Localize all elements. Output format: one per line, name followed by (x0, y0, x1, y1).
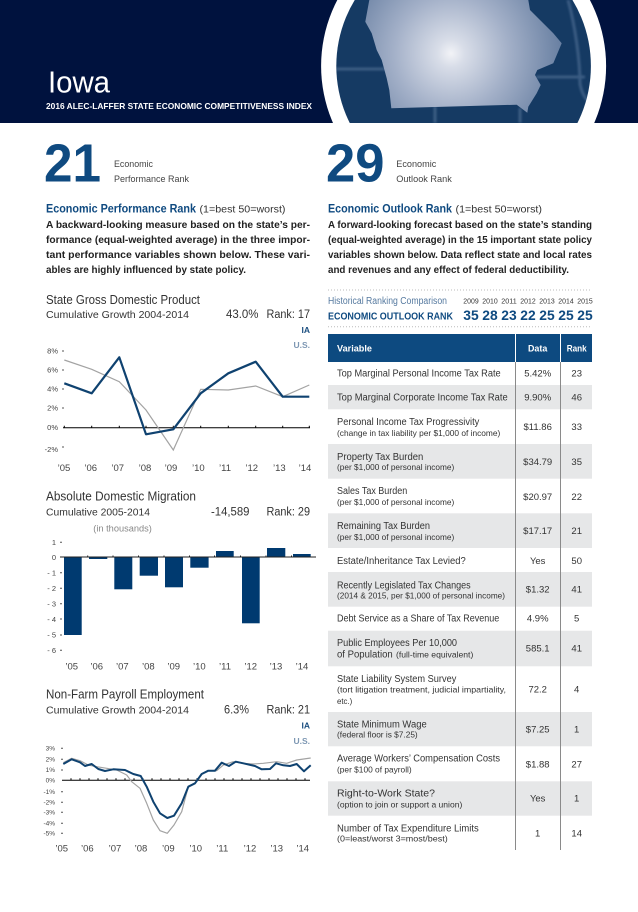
line chart: payroll employment (43, 746, 311, 854)
panel: economic performance (43, 134, 316, 854)
bar chart: domestic migration: ’09 (167, 662, 180, 672)
row: right to work: Yes (530, 794, 546, 805)
row: public employees: 41 (571, 644, 582, 655)
line chart: payroll employment: 1% (46, 767, 55, 774)
outlook heading (328, 202, 542, 216)
line chart: payroll employment: 0% (46, 778, 55, 784)
chart heading: domestic migration: Rank: 29 (266, 506, 310, 518)
historical ranking comparison: 2015 (577, 296, 593, 306)
row: liability survey: (tort litigation treatment, judicial impartiality, (337, 685, 506, 695)
outlook rank label: Outlook Rank (396, 174, 452, 185)
row: legislated tax changes: Recently Legislated Tax Changes (337, 580, 471, 591)
line chart: gross domestic product: ’06 (84, 463, 97, 474)
historical ranking comparison: 2014 (558, 296, 574, 306)
line chart: payroll employment: -5% (43, 830, 55, 838)
line chart: payroll employment: ’14 (296, 844, 309, 854)
row: sales tax: $20.97 (523, 492, 552, 503)
row: right to work (337, 789, 579, 810)
row: tax expenditure limits (337, 824, 582, 844)
bar chart: domestic migration: ’06 (90, 662, 103, 672)
row: estate tax (337, 556, 582, 567)
row: tax progressivity: (change in tax liability per $1,000 of income) (337, 428, 500, 438)
row: estate tax: 50 (571, 556, 582, 567)
historical ranking comparison: 2013 (539, 296, 555, 306)
historical ranking comparison: 2011 (501, 296, 517, 306)
row: liability survey: etc.) (337, 696, 352, 706)
line chart: payroll employment: -4% (43, 820, 55, 828)
historical ranking comparison: ECONOMIC OUTLOOK RANK (328, 310, 453, 322)
line chart: gross domestic product: ’10 (192, 463, 205, 474)
bar chart: domestic migration: ’11 (219, 662, 231, 672)
line chart: gross domestic product: 2% (47, 404, 58, 412)
row: public employees (337, 638, 582, 661)
row: minimum wage (337, 720, 579, 739)
row: minimum wage: 1 (574, 725, 579, 736)
line chart: payroll employment: ’12 (244, 844, 256, 854)
chart heading: payroll employment: 6.3% (224, 704, 249, 716)
bar chart: domestic migration: - 2 (47, 584, 56, 593)
performance description: formance (equal-weighted average) in the three impor- (46, 234, 310, 246)
row: right to work: 1 (574, 794, 579, 805)
historical ranking comparison: 25 (577, 307, 593, 323)
chart heading: domestic migration: (in thousands) (93, 524, 152, 534)
outlook description: A forward-looking forecast based on the state’s standing (328, 219, 592, 231)
row: corporate income tax rate: 9.90% (524, 393, 552, 404)
icon: globe ring (321, 0, 606, 123)
outlook heading: Economic Outlook Rank (328, 202, 452, 216)
bar chart: domestic migration: ’14 (296, 662, 308, 672)
performance heading: (1=best 50=worst) (200, 204, 286, 216)
performance rank number: 21 (44, 134, 101, 194)
line chart: gross domestic product: ’08 (139, 463, 151, 474)
performance description: tant performance variables shown below. These vari- (46, 249, 310, 261)
performance rank label: Economic (114, 159, 153, 170)
bar chart: domestic migration: - 6 (47, 646, 56, 655)
table row bands (328, 385, 592, 816)
bar chart: domestic migration: ’13 (270, 662, 282, 672)
row: personal income tax rate: 23 (571, 369, 582, 380)
chart heading: domestic migration: Absolute Domestic Migration (46, 490, 196, 504)
historical ranking comparison: 22 (520, 307, 536, 323)
line chart: gross domestic product: ’11 (219, 463, 231, 474)
line chart: payroll employment: ’06 (81, 844, 94, 854)
chart heading: gross domestic product (46, 293, 310, 350)
row: liability survey: State Liability System Survey (337, 674, 456, 685)
row: sales tax (337, 486, 582, 507)
row: property tax: 35 (571, 457, 582, 468)
line chart: gross domestic product: 8% (47, 346, 58, 356)
line chart: gross domestic product: ’12 (245, 463, 258, 474)
chart heading: payroll employment: Cumulative Growth 2004-2014 (46, 704, 189, 716)
outlook rank label: Economic (396, 159, 437, 170)
row: tax progressivity: 33 (571, 422, 582, 433)
performance rank label: Performance Rank (114, 174, 189, 185)
line chart: gross domestic product: ’07 (111, 463, 124, 474)
row: property tax: Property Tax Burden (337, 452, 423, 463)
table: policy variables (328, 334, 592, 850)
table header: Variable (337, 344, 372, 355)
row: debt service: 4.9% (527, 614, 549, 625)
chart heading: domestic migration (46, 490, 310, 534)
row: remaining tax (337, 521, 582, 542)
row: personal income tax rate: Top Marginal Personal Income Tax Rate (337, 369, 501, 380)
row: workers compensation (337, 754, 582, 775)
line chart: gross domestic product: 0% (47, 423, 58, 432)
panel: economic outlook (326, 134, 593, 850)
row: tax expenditure limits: 14 (571, 829, 582, 840)
row: remaining tax: Remaining Tax Burden (337, 521, 430, 532)
table header (328, 334, 592, 362)
historical ranking comparison: 25 (558, 307, 574, 323)
row: legislated tax changes: $1.32 (526, 585, 550, 596)
row: workers compensation: (per $100 of payroll) (337, 765, 412, 775)
historical ranking comparison: 23 (501, 307, 517, 323)
line chart: gross domestic product: ’09 (165, 463, 177, 474)
chart heading: payroll employment: Non-Farm Payroll Employment (46, 688, 204, 702)
row: public employees: Public Employees Per 10,000 (337, 638, 457, 649)
line chart: payroll employment: ’09 (162, 844, 175, 854)
row: property tax: $34.79 (523, 457, 552, 468)
line chart: gross domestic product (45, 346, 311, 474)
bar chart: domestic migration: - 3 (47, 600, 56, 608)
row: public employees: of Population (337, 650, 393, 661)
performance description: ables are highly influenced by state policy. (46, 264, 246, 276)
row: estate tax: Estate/Inheritance Tax Levied? (337, 556, 466, 567)
line chart: gross domestic product: -2% (45, 445, 58, 454)
row: sales tax: Sales Tax Burden (337, 486, 407, 497)
chart heading: gross domestic product: Cumulative Growth 2004-2014 (46, 309, 189, 321)
row: remaining tax: 21 (571, 526, 582, 537)
outlook heading: (1=best 50=worst) (456, 204, 542, 216)
historical ranking comparison: 28 (482, 307, 498, 323)
chart heading: gross domestic product: Rank: 17 (266, 309, 310, 321)
row: minimum wage: State Minimum Wage (337, 720, 427, 731)
row: liability survey (337, 674, 579, 706)
bar chart: domestic migration: 1 (52, 538, 56, 547)
title: Iowa (48, 64, 111, 99)
bar chart: domestic migration: - 1 (47, 568, 56, 578)
line chart: payroll employment: -3% (43, 810, 55, 816)
chart heading: payroll employment (46, 688, 310, 746)
line chart: payroll employment: ’10 (189, 844, 202, 854)
line chart: payroll employment: -1% (43, 789, 55, 796)
row: workers compensation: $1.88 (526, 760, 550, 771)
row: tax expenditure limits: 1 (535, 829, 540, 840)
line chart: payroll employment: 2% (46, 756, 55, 764)
subtitle: 2016 ALEC-LAFFER STATE ECONOMIC COMPETITIVENESS INDEX (46, 101, 312, 111)
row: debt service: 5 (574, 614, 579, 625)
line chart: payroll employment: ’13 (270, 844, 283, 854)
chart heading: payroll employment: Rank: 21 (266, 704, 310, 716)
row: legislated tax changes: (2014 & 2015, per $1,000 of personal income) (337, 590, 505, 600)
outlook description: variables shown below. Data reflect state and local rates (328, 249, 592, 261)
row: tax expenditure limits: Number of Tax Expenditure Limits (337, 824, 479, 835)
row: personal income tax rate: 5.42% (524, 369, 552, 380)
row: legislated tax changes (337, 580, 582, 600)
historical ranking comparison: 35 (463, 307, 479, 323)
bar chart: domestic migration: ’05 (65, 662, 78, 672)
row: tax progressivity (337, 417, 582, 438)
icon: Iowa state map (365, 0, 562, 113)
table header: Rank (567, 344, 587, 355)
row: corporate income tax rate: 46 (571, 393, 582, 404)
historical ranking comparison: 2010 (482, 296, 498, 306)
row: corporate income tax rate: Top Marginal Corporate Income Tax Rate (337, 393, 508, 404)
outlook rank number: 29 (326, 134, 384, 194)
historical ranking comparison: 2012 (520, 296, 536, 306)
bar chart: domestic migration (47, 538, 316, 672)
header banner (0, 0, 638, 123)
historical ranking comparison (328, 290, 593, 327)
row: property tax: (per $1,000 of personal income) (337, 462, 454, 472)
chart heading: gross domestic product: IA (302, 325, 310, 335)
chart heading: payroll employment: U.S. (293, 736, 310, 746)
row: liability survey: 4 (574, 685, 579, 696)
line chart: gross domestic product: 4% (47, 384, 58, 394)
line chart: gross domestic product: ’05 (58, 463, 70, 474)
chart heading: gross domestic product: U.S. (293, 340, 310, 350)
chart heading: domestic migration: -14,589 (211, 506, 250, 518)
row: right to work: (option to join or support a union) (337, 800, 462, 810)
row: remaining tax: $17.17 (523, 526, 552, 537)
chart heading: gross domestic product: 43.0% (226, 309, 258, 321)
performance heading (46, 202, 286, 216)
row: workers compensation: 27 (571, 760, 582, 771)
outlook rank label (396, 159, 452, 185)
outlook description: and revenues and any effect of federal deductibility. (328, 264, 569, 276)
historical ranking comparison: 25 (539, 307, 555, 323)
row: sales tax: 22 (571, 492, 582, 503)
line chart: gross domestic product: ’13 (273, 463, 286, 474)
performance rank label (114, 159, 189, 185)
row: tax progressivity: Personal Income Tax Progressivity (337, 417, 479, 428)
bar chart: domestic migration: - 4 (47, 615, 56, 624)
line chart: payroll employment: 3% (46, 746, 55, 752)
row: remaining tax: (per $1,000 of personal income) (337, 532, 454, 542)
row: liability survey: 72.2 (528, 685, 547, 696)
chart heading: gross domestic product: State Gross Domestic Product (46, 293, 200, 307)
row: sales tax: (per $1,000 of personal income) (337, 497, 454, 507)
performance description: A backward-looking measure based on the state’s per- (46, 219, 310, 231)
chart heading: domestic migration: Cumulative 2005-2014 (46, 506, 150, 518)
row: minimum wage: (federal floor is $7.25) (337, 729, 418, 739)
historical ranking comparison: Historical Ranking Comparison (328, 296, 447, 307)
row: workers compensation: Average Workers’ Compensation Costs (337, 754, 500, 765)
row: tax progressivity: $11.86 (524, 422, 552, 433)
line chart: payroll employment: ’05 (55, 844, 68, 854)
bar chart: domestic migration: - 5 (47, 630, 56, 640)
row: property tax (337, 452, 582, 472)
bar chart: domestic migration: ’07 (116, 662, 129, 672)
performance heading: Economic Performance Rank (46, 202, 196, 216)
row: public employees: 585.1 (526, 644, 550, 655)
outlook description (328, 219, 592, 276)
line chart: payroll employment: -2% (43, 800, 55, 806)
row: tax expenditure limits: (0=least/worst 3=most/best) (337, 834, 448, 844)
line chart: payroll employment: ’08 (135, 844, 147, 854)
chart heading: payroll employment: IA (302, 720, 310, 730)
bar chart: domestic migration: ’08 (142, 662, 155, 672)
row: minimum wage: $7.25 (526, 725, 550, 736)
line chart: gross domestic product: 6% (47, 366, 58, 374)
row: public employees: (full-time equivalent) (396, 650, 473, 660)
row: estate tax: Yes (530, 556, 546, 567)
bar chart: domestic migration: ’10 (193, 662, 206, 672)
line chart: gross domestic product: ’14 (299, 463, 311, 474)
line chart: payroll employment: ’07 (109, 844, 121, 854)
row: debt service: Debt Service as a Share of Tax Revenue (337, 614, 500, 625)
bar chart: domestic migration: ’12 (244, 662, 257, 672)
table header: Data (528, 344, 548, 355)
bar chart: domestic migration: 0 (52, 553, 56, 562)
outlook description: (equal-weighted average) in the 15 important state policy (328, 234, 592, 246)
performance description (46, 219, 310, 276)
row: right to work: Right-to-Work State? (337, 789, 435, 800)
historical ranking comparison: 2009 (463, 296, 479, 306)
line chart: payroll employment: ’11 (216, 844, 228, 854)
row: legislated tax changes: 41 (571, 585, 582, 596)
